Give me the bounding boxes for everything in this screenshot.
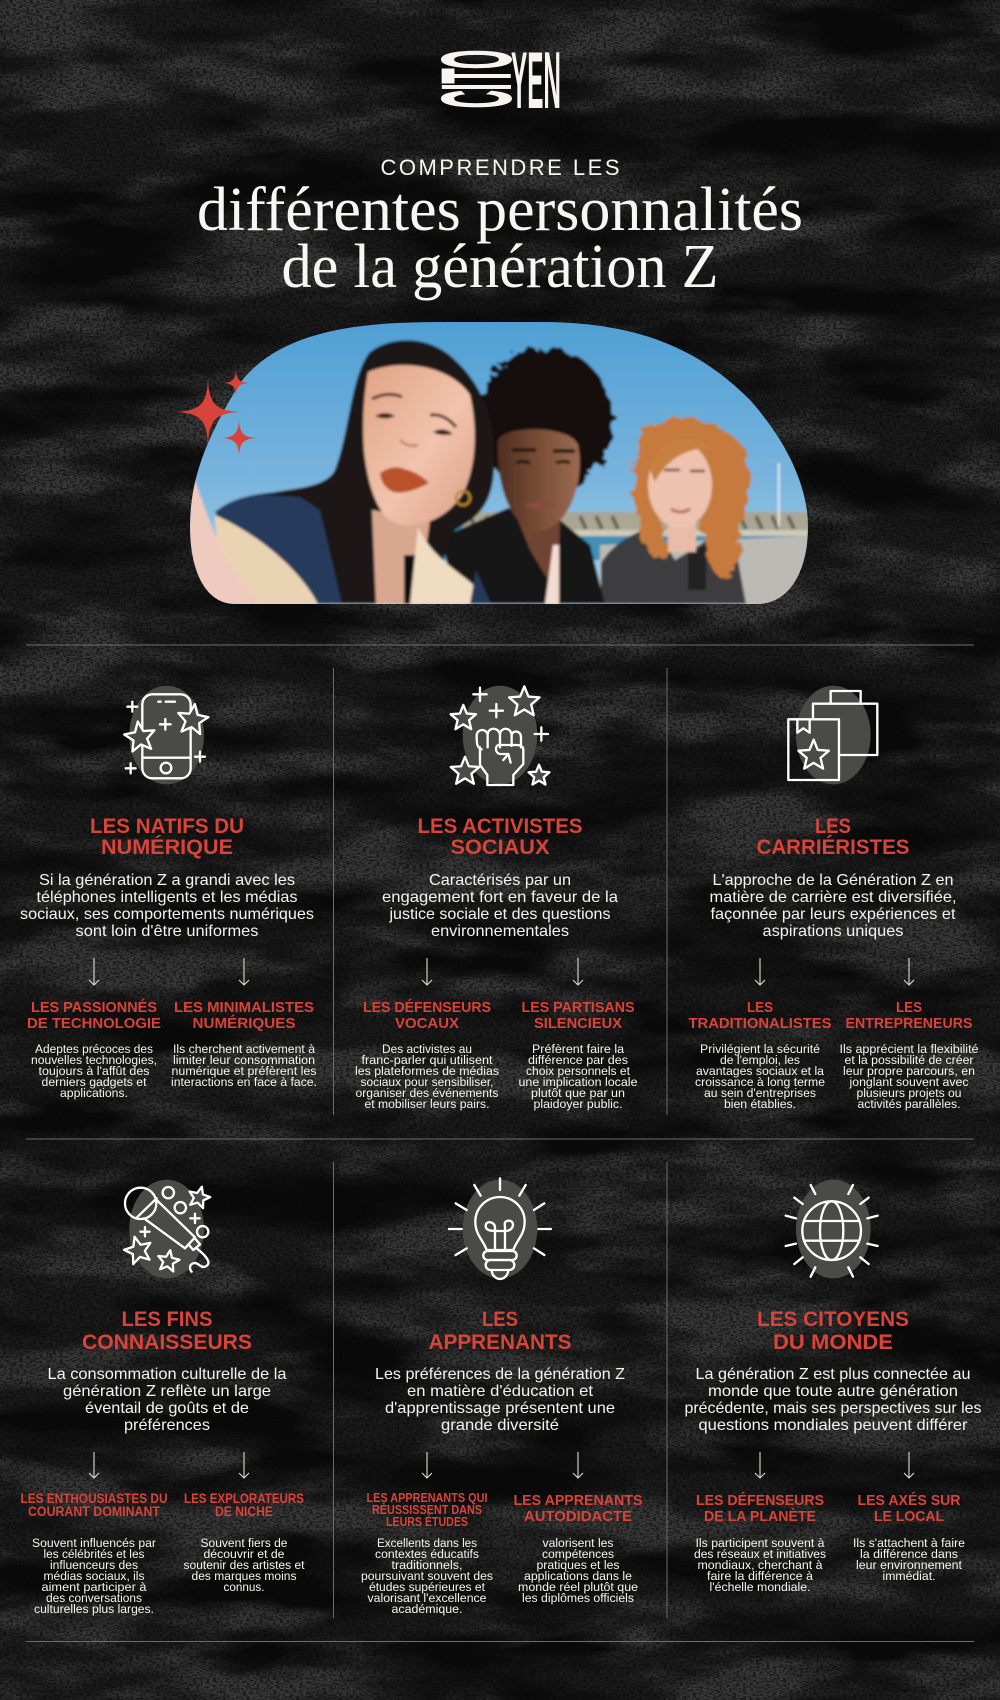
arrows (755, 1452, 914, 1478)
panel: citoyens du monde (684, 1180, 982, 1594)
subtype descriptions: plutôt que par un (531, 1086, 625, 1100)
subtype descriptions (32, 1536, 305, 1616)
subtype descriptions: faire la différence à (707, 1569, 813, 1583)
subtype headings: LES APPRENANTS QUI (366, 1491, 488, 1505)
intro text (48, 1366, 287, 1434)
panel: apprenants (361, 1178, 642, 1616)
subtype headings: AUTODIDACTE (524, 1508, 632, 1525)
subtype descriptions: sociaux pour sensibiliser, (360, 1075, 494, 1089)
intro text: génération Z reflète un large (63, 1383, 271, 1400)
intro text: environnementales (431, 923, 569, 940)
subtype headings: LES (896, 999, 922, 1016)
intro text: téléphones intelligents et les médias (36, 889, 298, 906)
intro text: matière de carrière est diversifiée, (710, 889, 956, 906)
icon: red sparkles (176, 370, 257, 456)
subtype descriptions: mondiaux, cherchant à (698, 1558, 823, 1572)
subtype headings: LES MINIMALISTES (174, 999, 314, 1016)
seawall and ground (430, 463, 810, 604)
subtype headings: DE LA PLANÈTE (704, 1508, 816, 1525)
intro text: monde que toute autre génération (708, 1383, 958, 1400)
subtype headings: LES EXPLORATEURS (184, 1491, 304, 1506)
subtype descriptions: Ils participent souvent à (696, 1536, 825, 1550)
subtype descriptions: des marques moins (192, 1569, 296, 1583)
title (197, 155, 803, 301)
subtype headings: DE NICHE (215, 1504, 273, 1519)
subtype descriptions: activités parallèles. (858, 1097, 960, 1111)
subtype descriptions: monde réel plutôt que (518, 1580, 638, 1594)
subtype descriptions: interactions en face à face. (171, 1075, 317, 1089)
intro text: d'apprentissage présentent une (385, 1400, 615, 1417)
subtype descriptions: nouvelles technologies, (31, 1053, 157, 1067)
subtype descriptions: avantages sociaux et la (696, 1064, 824, 1078)
subtype descriptions: franc-parler qui utilisent (362, 1053, 493, 1067)
subtype descriptions: derniers gadgets et (42, 1075, 147, 1089)
subtype descriptions: bien établies. (724, 1097, 796, 1111)
intro text: précédente, mais ses perspectives sur les (684, 1400, 982, 1417)
heading: LES CITOYENS (757, 1307, 909, 1331)
subtype descriptions: organiser des événements (356, 1086, 498, 1100)
subtype descriptions: découvrir et de (204, 1547, 285, 1561)
subtype descriptions: aiment participer à (42, 1580, 147, 1594)
subtype descriptions: Privilégient la sécurité (700, 1042, 820, 1056)
title: COMPRENDRE LES (380, 155, 620, 180)
subtype descriptions: immédiat. (882, 1569, 936, 1583)
intro text (375, 1366, 625, 1434)
subtype descriptions: croissance à long terme (695, 1075, 825, 1089)
subtype descriptions: leur propre parcours, en (843, 1064, 975, 1078)
person right (601, 418, 749, 604)
dividers (26, 645, 974, 1642)
subtype descriptions (31, 1042, 317, 1100)
subtype descriptions: académique. (392, 1602, 462, 1616)
arrows (89, 958, 249, 985)
heading: NUMÉRIQUE (101, 834, 233, 859)
subtype headings (688, 999, 972, 1032)
subtype descriptions: pratiques et les (536, 1558, 620, 1572)
intro text: éventail de goûts et de (85, 1400, 249, 1417)
intro text: grande diversité (441, 1417, 559, 1434)
intro text: engagement fort en faveur de la (382, 889, 618, 906)
intro text (710, 872, 956, 940)
person middle (442, 348, 613, 604)
subtype descriptions: et la possibilité de créer (844, 1053, 974, 1067)
intro text: L'approche de la Génération Z en (712, 872, 954, 889)
subtype headings: SILENCIEUX (534, 1015, 622, 1032)
subtype headings: COURANT DOMINANT (28, 1504, 161, 1519)
subtype descriptions: des réseaux et initiatives (694, 1547, 826, 1561)
icon: light bulb (449, 1178, 551, 1279)
heading (82, 1307, 252, 1354)
subtype descriptions: soutenir des artistes et (184, 1558, 305, 1572)
subtype headings: TRADITIONALISTES (688, 1015, 832, 1032)
intro text: façonnée par leurs expériences et (710, 906, 956, 923)
intro text: La consommation culturelle de la (48, 1366, 287, 1383)
intro text (382, 872, 618, 940)
subtype descriptions: plusieurs projets ou (856, 1086, 962, 1100)
subtype descriptions: limiter leur consommation (173, 1053, 315, 1067)
subtype descriptions: des conversations (46, 1591, 142, 1605)
heading: APPRENANTS (428, 1330, 572, 1354)
person left (190, 340, 494, 604)
subtype descriptions: Préfèrent faire la (532, 1042, 624, 1056)
title: différentes personnalités (197, 176, 803, 244)
subtype headings (696, 1492, 961, 1525)
panel: carriéristes (688, 686, 979, 1111)
subtype headings: ENTREPRENEURS (846, 1015, 972, 1032)
subtype descriptions: jonglant souvent avec (848, 1075, 968, 1089)
subtype headings: RÉUSSISSENT DANS (372, 1502, 482, 1517)
heading: CONNAISSEURS (82, 1330, 252, 1354)
subtype descriptions: valorisent les (542, 1536, 614, 1550)
heading: LES FINS (122, 1307, 212, 1331)
subtype descriptions: au sein d'entreprises (704, 1086, 816, 1100)
subtype descriptions: les célébrités et les (44, 1547, 144, 1561)
subtype headings: LES (747, 999, 773, 1016)
subtype descriptions: culturelles plus larges. (34, 1602, 154, 1616)
subtype headings (20, 1491, 304, 1519)
subtype descriptions: compétences (542, 1547, 614, 1561)
subtype descriptions: et mobiliser leurs pairs. (364, 1097, 490, 1111)
subtype headings: LES ENTHOUSIASTES DU (20, 1491, 168, 1506)
intro text: aspirations uniques (762, 923, 904, 940)
icon: shopping bags with star (788, 686, 877, 784)
subtype descriptions: Adeptes précoces des (35, 1042, 153, 1056)
subtype headings (363, 999, 634, 1032)
subtype descriptions: Souvent fiers de (200, 1536, 288, 1550)
intro text: questions mondiales peuvent différer (698, 1417, 968, 1434)
arrows (422, 958, 583, 985)
subtype descriptions: poursuivant souvent des (361, 1569, 493, 1583)
subtype descriptions: traditionnels, (392, 1558, 462, 1572)
title: de la génération Z (282, 233, 718, 301)
subtype descriptions: influenceurs des (50, 1558, 138, 1572)
subtype descriptions: une implication locale (518, 1075, 638, 1089)
arrows (89, 1452, 249, 1478)
heading (757, 1307, 909, 1354)
heading (418, 814, 582, 859)
icon: smartphone with stars (123, 686, 210, 784)
heading (428, 1307, 572, 1354)
hero photo of three young people (185, 320, 815, 610)
subtype descriptions: la différence dans (860, 1547, 958, 1561)
icon: globe with rays (786, 1180, 878, 1278)
subtype headings: LE LOCAL (874, 1508, 944, 1525)
subtype headings: LES PARTISANS (522, 999, 634, 1016)
subtype descriptions: connus. (224, 1580, 264, 1594)
heading: LES (482, 1307, 518, 1331)
subtype headings: DE TECHNOLOGIE (27, 1015, 161, 1032)
subtype headings: LES DÉFENSEURS (363, 999, 491, 1016)
subtype descriptions: les plateformes de médias (355, 1064, 499, 1078)
intro text: Les préférences de la génération Z (375, 1366, 625, 1383)
subtype descriptions: Ils s'attachent à faire (853, 1536, 965, 1550)
subtype descriptions: médias sociaux, ils (44, 1569, 144, 1583)
arrows (755, 958, 914, 985)
subtype descriptions: Souvent influencés par (32, 1536, 156, 1550)
subtype descriptions: différence par des (528, 1053, 628, 1067)
subtype headings: NUMÉRIQUES (192, 1015, 296, 1032)
subtype headings (366, 1491, 642, 1529)
subtype descriptions: numérique et préfèrent les (172, 1064, 316, 1078)
icon: microphone with stars (121, 1180, 212, 1278)
subtype descriptions: Des activistes au (382, 1042, 472, 1056)
intro text: Caractérisés par un (429, 872, 571, 889)
subtype descriptions: valorisant l'excellence (368, 1591, 487, 1605)
subtype descriptions: choix personnels et (526, 1064, 631, 1078)
arrows (422, 1452, 583, 1478)
subtype descriptions (695, 1042, 979, 1111)
subtype headings: LES PASSIONNÉS (31, 999, 157, 1016)
subtype descriptions: applications. (60, 1086, 128, 1100)
subtype headings: LEURS ÉTUDES (386, 1514, 468, 1529)
subtype descriptions: études supérieures et (369, 1580, 486, 1594)
subtype descriptions (355, 1042, 638, 1111)
panel: activistes sociaux (355, 686, 638, 1111)
heading (756, 814, 910, 859)
intro text: en matière d'éducation et (407, 1383, 594, 1400)
subtype descriptions: leur environnement (856, 1558, 963, 1572)
subtype headings: LES DÉFENSEURS (696, 1492, 824, 1509)
intro text: sociaux, ses comportements numériques (20, 906, 314, 923)
subtype descriptions (694, 1536, 965, 1594)
subtype descriptions: Excellents dans les (377, 1536, 477, 1550)
subtype descriptions: contextes éducatifs (375, 1547, 479, 1561)
heading: CARRIÉRISTES (756, 834, 910, 859)
intro text: préférences (124, 1417, 210, 1434)
heading: LES (815, 814, 851, 838)
subtype descriptions: Ils apprécient la flexibilité (840, 1042, 979, 1056)
subtype headings: LES APPRENANTS (514, 1492, 642, 1509)
text: YEN (511, 36, 561, 126)
subtype headings (27, 999, 314, 1032)
subtype descriptions: l'échelle mondiale. (710, 1580, 810, 1594)
intro text: La génération Z est plus connectée au (696, 1366, 970, 1383)
heading: SOCIAUX (450, 835, 550, 859)
intro text: justice sociale et des questions (388, 906, 610, 923)
intro text (684, 1366, 982, 1434)
logo (422, 36, 561, 126)
heading: LES ACTIVISTES (418, 814, 582, 838)
heading: LES NATIFS DU (90, 814, 244, 838)
subtype headings: VOCAUX (395, 1015, 459, 1032)
subtype descriptions: Ils cherchent activement à (173, 1042, 315, 1056)
subtype headings: LES AXÉS SUR (858, 1492, 961, 1509)
subtype descriptions: les diplômes officiels (522, 1591, 634, 1605)
intro text: sont loin d'être uniformes (76, 923, 258, 940)
subtype descriptions: toujours à l'affût des (38, 1064, 150, 1078)
panel: fins connaisseurs (20, 1180, 305, 1616)
intro text (20, 872, 314, 940)
subtype descriptions (361, 1536, 638, 1616)
subtype descriptions: applications dans le (524, 1569, 632, 1583)
icon: raised fist with stars (451, 686, 549, 785)
panel: natifs du numérique (20, 686, 317, 1100)
subtype descriptions: de l'emploi, les (720, 1053, 800, 1067)
subtype descriptions: plaidoyer public. (534, 1097, 622, 1111)
heading (90, 814, 244, 859)
intro text: Si la génération Z a grandi avec les (39, 872, 295, 889)
heading: DU MONDE (773, 1330, 893, 1354)
